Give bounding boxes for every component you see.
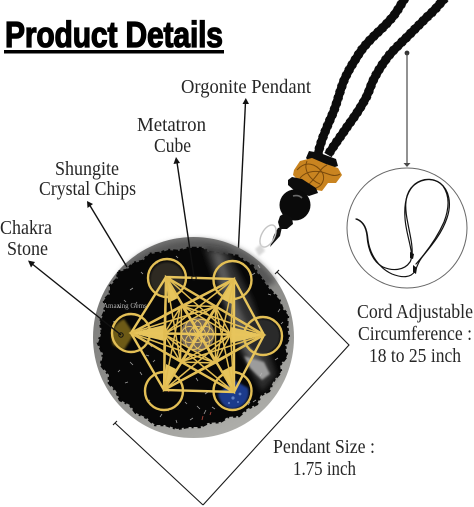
label: chakra stone [0, 217, 52, 260]
dark glossy region top left [150, 262, 184, 296]
label: metatron cube [137, 114, 206, 157]
chakra stone: lapis [218, 380, 249, 409]
outer circles [112, 259, 282, 410]
dimension bracket: pendant size [113, 421, 203, 505]
label: pendant size: 1.75 inch [293, 458, 356, 480]
metatron cube [112, 259, 282, 410]
label: shungite crystal chips: Shungite [55, 158, 119, 180]
shungite chips [98, 248, 289, 429]
inner lattice [131, 277, 264, 392]
central tan glow [180, 318, 214, 352]
title: Product Details [5, 15, 223, 56]
inset circle: cord loop [347, 168, 467, 288]
necklace cords [318, 0, 445, 155]
label: chakra stone: Stone [7, 238, 48, 260]
label: pendant size [273, 436, 375, 480]
right stone [246, 319, 280, 353]
pendant body [93, 237, 294, 438]
light streak [212, 250, 264, 376]
dimension bracket: cord side [203, 270, 349, 505]
pendant [93, 237, 294, 438]
chakra stone: tiger eye [112, 319, 134, 350]
grey banded stripe [204, 248, 276, 392]
label: cord adjustable circumference: 18 to 25 inch [369, 345, 461, 367]
label: shungite crystal chips [39, 158, 136, 200]
label: orgonite pendant: Orgonite Pendant [181, 76, 311, 98]
chip sparkles [113, 256, 283, 423]
arrow: chakra stone [28, 260, 123, 337]
label: shungite crystal chips: Crystal Chips [39, 178, 136, 200]
label: pendant size: Pendant Size : [273, 436, 375, 458]
silver ring [257, 222, 279, 250]
watermark: Amazing Gems [103, 302, 147, 310]
arrow: shungite chips [87, 201, 127, 267]
knot and bead [270, 151, 342, 247]
label: metatron cube: Cube [154, 135, 191, 157]
outer hexagon and hexagram [131, 277, 264, 392]
red chip flecks [167, 389, 211, 420]
lapis flecks [228, 393, 241, 404]
label: metatron cube: Metatron [137, 114, 206, 136]
label: chakra stone: Chakra [0, 217, 52, 239]
label: cord adjustable circumference [357, 301, 473, 367]
arrow: cord [404, 51, 410, 167]
central flower [182, 320, 214, 350]
solid gold star points [131, 277, 264, 392]
arrow: metatron cube [174, 157, 196, 280]
silver clasp [255, 244, 265, 256]
arrow: orgonite pendant [238, 98, 249, 257]
bright streak [244, 356, 270, 380]
upper dome sheen [116, 240, 276, 300]
